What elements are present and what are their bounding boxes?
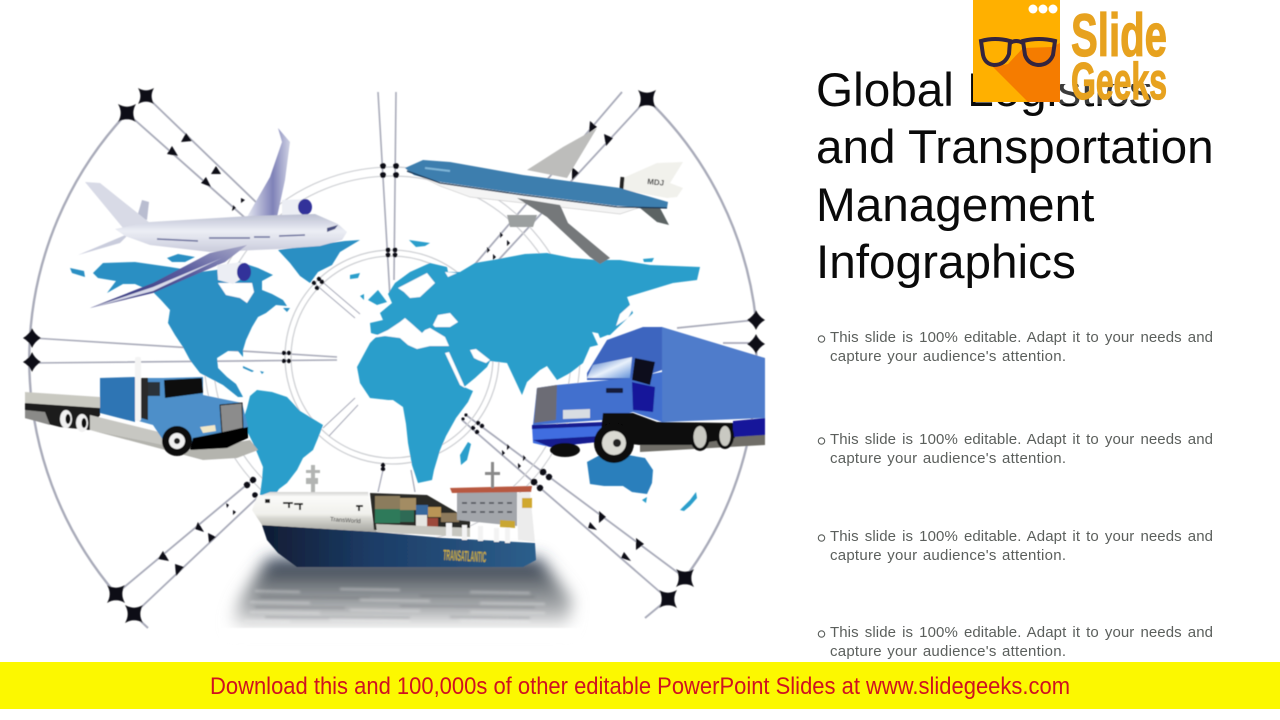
ship name: TransWorld [330, 517, 361, 525]
bullet list [818, 329, 1213, 660]
bullet 1: This slide is 100% editable. Adapt it to your needs and [830, 329, 1213, 346]
bullet 3 [818, 528, 1213, 564]
icon: glasses [981, 39, 1055, 65]
map: Africa and Eurasia [357, 253, 700, 483]
tail lettering: MDJ [647, 177, 665, 188]
bullet 3: capture your audience's attention. [830, 547, 1066, 564]
map: islands [350, 240, 697, 511]
bullet 4: capture your audience's attention. [830, 643, 1066, 660]
plane: blue airliner [405, 128, 683, 264]
cargo ship [252, 462, 536, 567]
bullet 2: capture your audience's attention. [830, 450, 1066, 467]
map: land colour [243, 240, 700, 511]
title: and Transportation [816, 121, 1214, 174]
map: Australia [587, 455, 653, 494]
map: white seas [218, 272, 636, 388]
illustration: logistics hub [23, 88, 765, 642]
truck: right blue box truck [532, 327, 765, 463]
cargo ship: TRANSATLANTIC [443, 547, 487, 566]
map: Canadian islands [167, 254, 290, 374]
title [816, 64, 1214, 289]
title: Global Logistics [816, 64, 1153, 117]
water reflection [220, 558, 580, 642]
small network nodes [158, 121, 644, 576]
download banner: Download this and 100,000s of other editable PowerPoint Slides at www.slidegeeks.com [210, 673, 1070, 700]
network star nodes [23, 88, 765, 623]
logo: Slide Geeks [973, 0, 1172, 111]
download banner [0, 662, 1280, 709]
map: North America [70, 240, 360, 397]
title: Infographics [816, 236, 1076, 289]
plane: silver airliner [78, 128, 347, 308]
bullet 3: This slide is 100% editable. Adapt it to your needs and [830, 528, 1213, 545]
bullet 1: capture your audience's attention. [830, 348, 1066, 365]
bullet 1 [818, 329, 1213, 365]
bullet 2 [818, 431, 1213, 467]
network lines and rings [29, 92, 757, 628]
bullet 4 [818, 624, 1213, 660]
bullet 2: This slide is 100% editable. Adapt it to your needs and [830, 431, 1213, 448]
logo wordmark: Slide [1071, 2, 1167, 69]
title: Management [816, 179, 1094, 232]
world map [70, 240, 700, 511]
truck: left blue semi [25, 357, 258, 460]
map: South America [243, 390, 323, 495]
logo: Slide Geeks: Geeks [1071, 53, 1167, 111]
map: Greenland [278, 240, 360, 283]
bullet 4: This slide is 100% editable. Adapt it to your needs and [830, 624, 1213, 641]
